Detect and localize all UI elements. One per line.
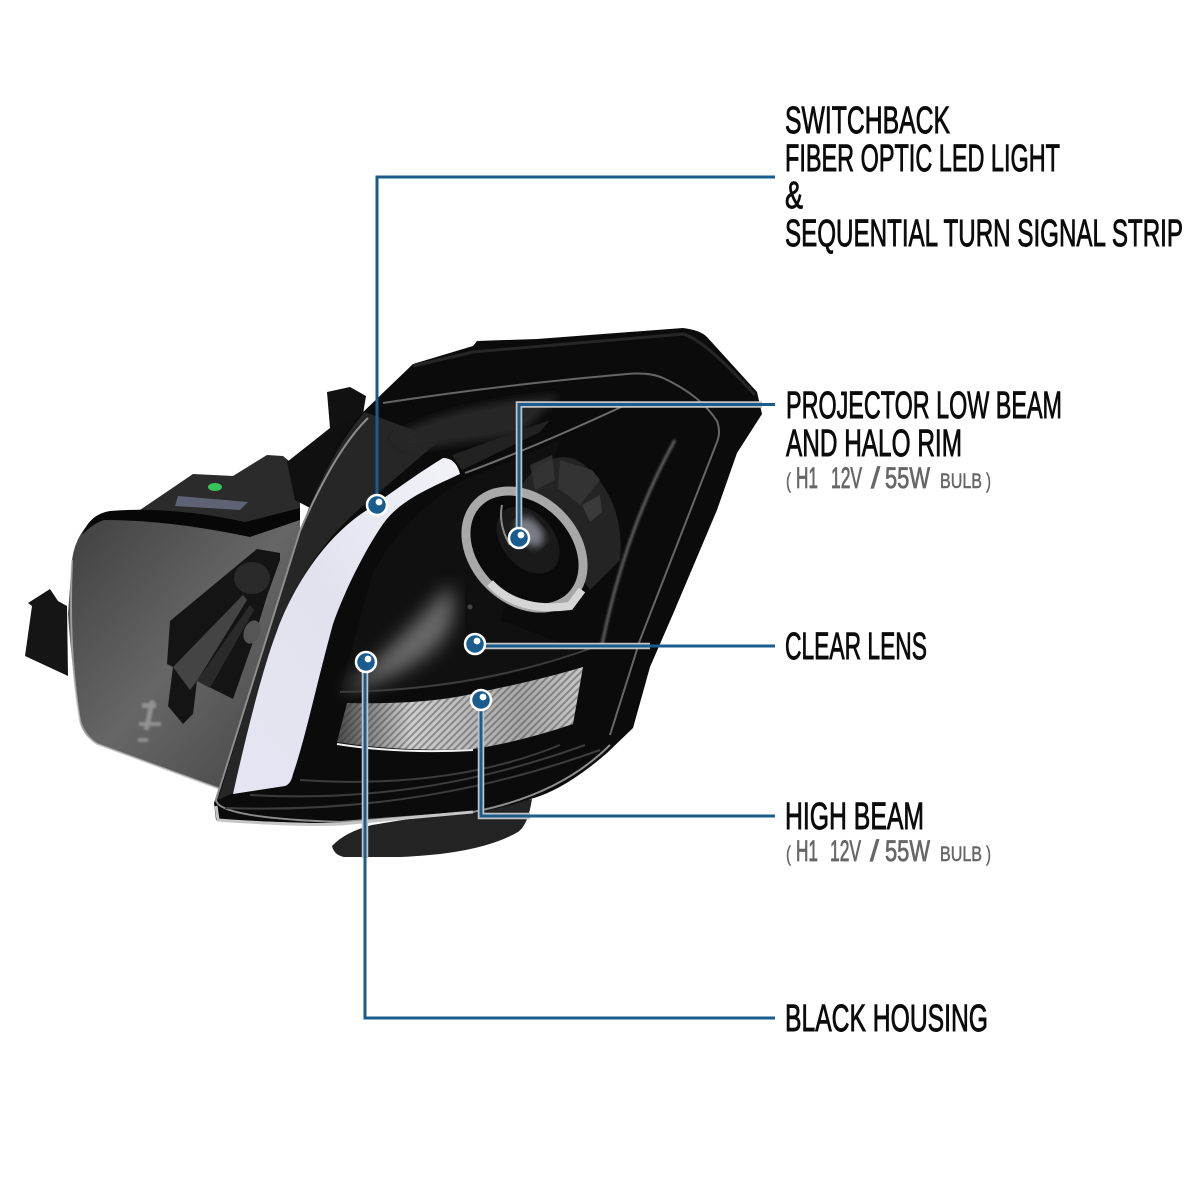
label: switchback fiber optic and sequential strip: SWITCHBACK	[785, 100, 950, 142]
label: projector low beam and halo rim: H1	[796, 462, 818, 495]
callout: projector leader	[509, 404, 775, 548]
dark band between lens edge and strip	[218, 412, 440, 800]
label: projector low beam and halo rim: (	[786, 470, 791, 493]
rear dark module with green indicator	[137, 387, 366, 528]
label: black housing: BLACK HOUSING	[785, 998, 988, 1040]
label: high beam: 55W	[885, 835, 930, 868]
callout: clear lens leader	[465, 634, 775, 654]
connector tab on the far left	[25, 589, 68, 676]
label: high beam: 12V	[830, 835, 861, 868]
switchback LED strip	[233, 458, 460, 794]
label: projector low beam and halo rim: /	[871, 462, 881, 495]
halo ring and projector lens	[437, 462, 612, 637]
label: high beam: HIGH BEAM	[785, 796, 924, 838]
lower lens shine	[216, 806, 473, 824]
label: high beam: BULB	[940, 843, 982, 866]
top bezel frame	[383, 374, 719, 735]
label: switchback fiber optic and sequential strip: &	[785, 175, 803, 217]
headlight product illustration	[25, 328, 762, 857]
label: switchback fiber optic and sequential strip	[785, 100, 1183, 255]
outer clear lens edge	[216, 418, 610, 822]
label: high beam: /	[870, 835, 880, 868]
callout: switchback leader	[367, 177, 775, 515]
projector rear shell	[520, 455, 621, 590]
label: projector low beam and halo rim: 55W	[885, 462, 930, 495]
label: high beam	[785, 796, 991, 868]
side lens panel	[68, 508, 300, 789]
high beam clear section	[337, 667, 583, 751]
label: projector low beam and halo rim: 12V	[831, 462, 862, 495]
lower mounting tab	[332, 799, 532, 857]
inner right highlight	[602, 440, 675, 645]
grey reflection on face	[345, 585, 454, 692]
housing body	[214, 328, 762, 824]
lower face line	[340, 645, 600, 692]
face shadow between strip and projector	[340, 440, 580, 692]
label: projector low beam and halo rim: AND HALO RIM	[786, 423, 962, 465]
label: clear lens: CLEAR LENS	[785, 626, 927, 668]
upper reflector highlight	[392, 395, 560, 450]
callout: black housing leader	[356, 652, 775, 1018]
label: projector low beam and halo rim: BULB	[940, 470, 982, 493]
lower housing ribs	[225, 745, 600, 809]
side lens slot	[167, 549, 280, 724]
label: projector low beam and halo rim: )	[986, 470, 991, 493]
screw hole	[468, 604, 472, 610]
embossed marking	[138, 700, 161, 742]
label: high beam: )	[986, 843, 991, 866]
label: high beam: H1	[796, 835, 818, 868]
label: high beam: (	[786, 843, 791, 866]
callout: high beam leader	[471, 690, 775, 816]
label: projector low beam and halo rim	[786, 385, 1062, 495]
